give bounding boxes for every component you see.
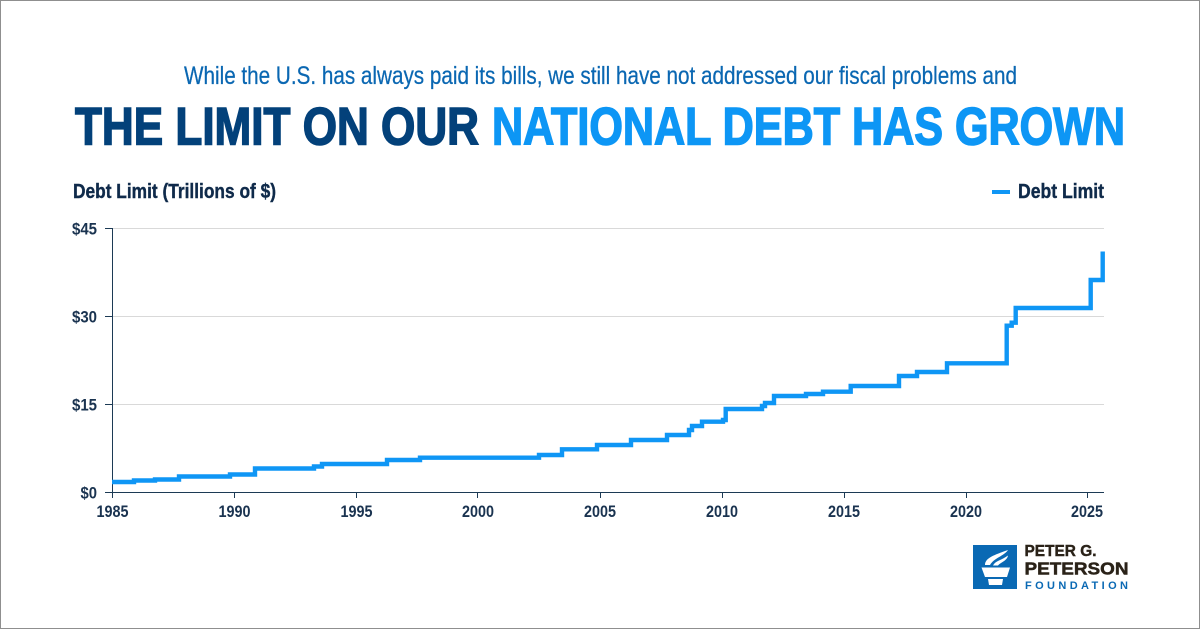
- logo wordmark: [1024, 543, 1128, 592]
- title: [75, 98, 1125, 156]
- x-axis labels: 2000: [462, 503, 494, 521]
- y-axis labels: $0: [80, 484, 97, 502]
- gridlines: [112, 228, 1104, 404]
- y-axis title: Debt Limit (Trillions of $): [73, 181, 276, 203]
- title: THE LIMIT ON OUR: [75, 98, 479, 156]
- y-axis labels: $30: [72, 308, 97, 326]
- line chart: debt limit: [72, 220, 1104, 521]
- axes: [105, 228, 1104, 498]
- x-axis labels: 2015: [828, 503, 860, 521]
- icon: torch: [973, 545, 1017, 589]
- x-axis labels: 1985: [96, 503, 128, 521]
- y-axis labels: $15: [72, 396, 97, 414]
- x-axis labels: 2010: [706, 503, 738, 521]
- x-axis labels: 2005: [584, 503, 616, 521]
- logo: Peter G. Peterson Foundation: [973, 543, 1128, 592]
- x-axis labels: [96, 503, 1103, 521]
- x-axis labels: 1995: [340, 503, 372, 521]
- x-axis labels: 2025: [1071, 503, 1103, 521]
- y-axis labels: $45: [72, 220, 97, 238]
- debt limit step line: [112, 252, 1103, 482]
- subtitle: While the U.S. has always paid its bills, we still have not addressed our fiscal problems and: [184, 62, 1017, 90]
- x-axis labels: 2020: [950, 503, 982, 521]
- x-axis labels: 1990: [218, 503, 250, 521]
- logo wordmark: FOUNDATION: [1025, 580, 1128, 592]
- y-axis labels: [72, 220, 97, 502]
- legend: [992, 181, 1104, 203]
- legend: Debt Limit: [1018, 181, 1104, 203]
- logo wordmark: PETER G.: [1024, 543, 1096, 560]
- logo wordmark: PETERSON: [1024, 558, 1128, 578]
